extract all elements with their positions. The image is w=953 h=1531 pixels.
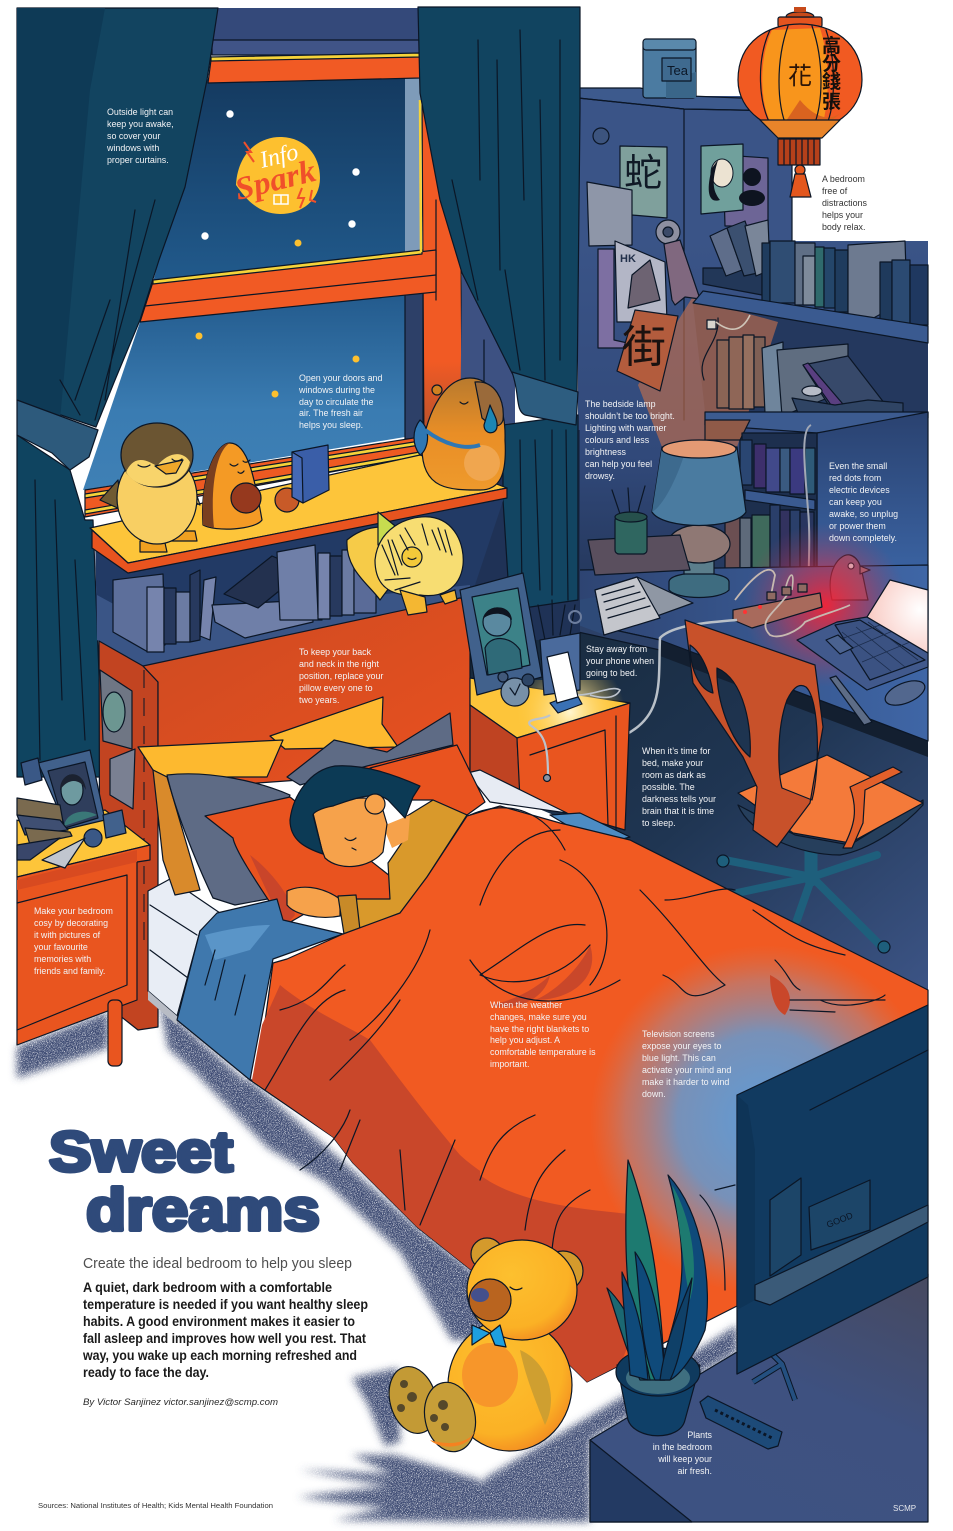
- note: darkness: [642, 746, 716, 828]
- note: plants: air fresh.: [677, 1466, 712, 1476]
- note: television: [642, 1029, 731, 1099]
- shelf back wall: [693, 303, 928, 412]
- note: darkness: bed, make your: [642, 758, 703, 768]
- intro text: way, you wake up each morning refreshed and: [82, 1348, 357, 1363]
- note: bedside lamp: shouldn’t be too bright.: [585, 411, 675, 421]
- icon: Chinese lantern: 張: [822, 92, 841, 113]
- note: blankets: When the weather: [490, 1000, 562, 1010]
- dark wall behind shelf: [462, 430, 580, 640]
- phone cable: [529, 715, 550, 776]
- note: decorating: [34, 906, 113, 976]
- note: blankets: comfortable temperature is: [490, 1047, 596, 1057]
- icon: Chinese lantern: 錢: [822, 70, 841, 93]
- icon: penguin toy: [100, 423, 200, 552]
- chair base: [725, 850, 880, 945]
- intro text: ready to face the day.: [83, 1365, 209, 1380]
- duck figure: [830, 555, 870, 600]
- icon: Info Spark logo: [231, 137, 320, 214]
- wall posters: [587, 128, 768, 391]
- curtain tie: [512, 372, 578, 425]
- note: fresh air: helps you sleep.: [299, 420, 363, 430]
- note: decorating: memories with: [34, 954, 91, 964]
- note: outside light: windows with: [106, 143, 159, 153]
- window frame: [422, 97, 462, 450]
- seat: [738, 800, 923, 855]
- grey pillows: [287, 713, 453, 785]
- icon: remote control: [700, 1396, 782, 1449]
- note: distractions: body relax.: [822, 222, 865, 232]
- note: bedside lamp: can help you feel: [585, 459, 652, 469]
- note: phone: [586, 644, 654, 678]
- note: distractions: [822, 174, 867, 232]
- icon: snake plant in pot: [607, 1160, 707, 1436]
- panel: window wall: [83, 8, 580, 640]
- note: red dots: red dots from: [829, 473, 881, 483]
- icon: blue book: [292, 445, 329, 503]
- note: distractions: A bedroom: [822, 174, 865, 184]
- icon: tea canister: [643, 39, 696, 98]
- icon: Chinese lantern: 高: [822, 34, 841, 57]
- note: blankets: important.: [490, 1059, 529, 1069]
- backrest: [685, 620, 823, 847]
- icon: cat toy: [347, 512, 463, 615]
- panel: right curtain: [418, 7, 580, 610]
- note: outside light: so cover your: [107, 131, 160, 141]
- note: darkness: possible. The: [642, 782, 695, 792]
- icon: capybara toy: [414, 378, 505, 490]
- note: bedside lamp: brightness: [585, 447, 627, 457]
- note: television: make it harder to wind: [642, 1077, 729, 1087]
- lower cabinet top and side: [705, 412, 928, 433]
- note: pillow: [299, 647, 383, 705]
- note: darkness: darkness tells your: [642, 794, 716, 804]
- note: blankets: [490, 1000, 596, 1069]
- note: phone: your phone when: [586, 656, 654, 666]
- note: pillow: position, replace your: [299, 671, 383, 681]
- note: fresh air: air. The fresh air: [299, 408, 363, 418]
- photo frame: [38, 750, 105, 829]
- hand and sleeve: [287, 887, 340, 917]
- neck: [383, 815, 410, 848]
- icon: Chinese lantern: 分: [822, 53, 841, 75]
- intro text: fall asleep and improves how well you rest. That: [83, 1331, 366, 1346]
- note: outside light: [106, 107, 174, 165]
- icon: avocado toy: [203, 443, 299, 529]
- icon: teddy bear: [382, 1238, 583, 1456]
- note: fresh air: [298, 373, 382, 430]
- yellow pillows: [270, 697, 398, 749]
- cord and wall charms: [702, 318, 718, 380]
- note: red dots: can keep you: [829, 497, 882, 507]
- note: blankets: help you adjust. A: [490, 1035, 560, 1045]
- note: pillow: and neck in the right: [299, 659, 379, 669]
- note: television: Television screens: [642, 1029, 715, 1039]
- note: blankets: have the right blankets to: [490, 1024, 589, 1034]
- blanket: [250, 806, 928, 1382]
- note: distractions: helps your: [822, 210, 863, 220]
- icon: Chinese lantern: [738, 7, 862, 197]
- note: decorating: it with pictures of: [34, 930, 101, 940]
- pencil cup and desk items: [588, 486, 690, 575]
- shelf books: [113, 545, 376, 652]
- stars: [196, 110, 360, 398]
- note: fresh air: day to circulate the: [299, 397, 374, 407]
- note: plants: [653, 1430, 713, 1476]
- note: pillow: To keep your back: [299, 647, 372, 657]
- icon: Info Spark logo: Info: [256, 139, 301, 174]
- note: pillow: pillow every one to: [299, 683, 373, 693]
- girl: [287, 766, 467, 934]
- note: pillow: two years.: [299, 695, 339, 705]
- icon: tea canister: Tea: [667, 63, 689, 78]
- intro text: temperature is needed if you want healthy sleep: [83, 1297, 368, 1312]
- torso: [340, 800, 467, 934]
- lamp light cone: [638, 298, 778, 447]
- note: decorating: your favourite: [34, 942, 88, 952]
- note: blankets: changes, make sure you: [490, 1012, 587, 1022]
- note: bedside lamp: The bedside lamp: [585, 399, 656, 409]
- small frames and books: [21, 758, 42, 785]
- icon: Info Spark logo: Spark: [231, 152, 319, 207]
- panel: right room wall and shelves: [578, 88, 928, 620]
- note: red dots: awake, so unplug: [829, 509, 898, 519]
- hair: [290, 766, 420, 854]
- note: outside light: Outside light can: [107, 107, 173, 117]
- middle shelf books: [717, 335, 903, 425]
- byline: By Victor Sanjinez victor.sanjinez@scmp.com: [83, 1397, 278, 1408]
- panel: TV stand: [590, 1274, 928, 1522]
- note: darkness: brain that it is time: [642, 806, 714, 816]
- intro text: A quiet, dark bedroom with a comfortable: [83, 1280, 332, 1295]
- subtitle: Create the ideal bedroom to help you sleep: [83, 1256, 352, 1272]
- alarm clock: [501, 678, 529, 706]
- photo frame: [460, 573, 542, 695]
- far blue sheet: [550, 813, 630, 845]
- sources: Sources: National Institutes of Health; Kids Mental Health Foundation: [38, 1501, 273, 1510]
- power strip and cables: [625, 570, 850, 735]
- blanket folds: [490, 945, 790, 1015]
- title: dreams: [86, 1177, 320, 1243]
- phone: [550, 693, 582, 713]
- blanket shaded side: [252, 985, 646, 1382]
- note: decorating: friends and family.: [34, 966, 105, 976]
- rear orange pillow: [370, 745, 485, 815]
- mattress: [148, 879, 220, 1016]
- title: [49, 1120, 320, 1243]
- note: distractions: free of: [822, 186, 848, 196]
- icon: bedside lamp: [652, 440, 746, 598]
- window sill: [85, 437, 424, 517]
- note: outside light: keep you awake,: [107, 119, 174, 129]
- title: Sweet: [49, 1120, 233, 1184]
- panel: left nightstand: [17, 750, 150, 1066]
- panel: right nightstand: [460, 573, 630, 830]
- red glow from electric devices: [740, 520, 928, 690]
- note: fresh air: Open your doors and: [299, 373, 382, 383]
- note: darkness: to sleep.: [642, 818, 676, 828]
- wall posters: 街: [622, 323, 666, 372]
- floor shadows: [17, 1005, 737, 1522]
- panel: left curtain: [17, 8, 218, 777]
- pen cup: [538, 600, 575, 640]
- note: bedside lamp: Lighting with warmer: [585, 423, 666, 433]
- note: decorating: cosy by decorating: [34, 918, 108, 928]
- note: bedside lamp: drowsy.: [585, 471, 615, 481]
- note: bedside lamp: [585, 399, 675, 481]
- icon: television rear: [737, 1005, 928, 1400]
- panel: desk and floor: [470, 565, 928, 1000]
- note: fresh air: windows during the: [298, 385, 375, 395]
- blue sheet: [177, 899, 343, 1080]
- note: red dots: electric devices: [829, 485, 890, 495]
- window glass: [153, 78, 405, 282]
- intro text: [82, 1280, 368, 1380]
- credit: SCMP: [893, 1504, 916, 1513]
- note: bedside lamp: colours and less: [585, 435, 650, 445]
- note: darkness: When it’s time for: [642, 746, 710, 756]
- pinned photos: [100, 670, 132, 749]
- lower cabinet books: [725, 440, 815, 582]
- panel: bed: [138, 697, 928, 1382]
- note: red dots: Even the small: [829, 461, 887, 471]
- icon: Chinese lantern: 花: [788, 63, 812, 90]
- blue TV glow on blanket: [520, 840, 928, 1382]
- upper shelf board: [693, 291, 928, 343]
- top shelf books: [703, 220, 928, 325]
- note: television: activate your mind and: [642, 1065, 731, 1075]
- note: red dots: or power them: [829, 521, 886, 531]
- panel: desk chair: [685, 620, 923, 953]
- curtain tie: [17, 400, 98, 470]
- note: plants: Plants: [687, 1430, 713, 1440]
- note: red dots: [829, 461, 898, 543]
- intro text: habits. A good environment makes it easier to: [83, 1314, 355, 1329]
- wall posters: HK: [620, 253, 636, 265]
- laptop: [797, 580, 928, 725]
- note: red dots: down completely.: [829, 533, 897, 543]
- head pillow: [205, 797, 395, 924]
- note: decorating: Make your bedroom: [34, 906, 113, 916]
- note: television: blue light. This can: [642, 1053, 716, 1063]
- wall posters: 蛇: [624, 153, 662, 195]
- note: phone: Stay away from: [586, 644, 647, 654]
- face: [313, 798, 387, 867]
- panel: bookshelf and headboard: [90, 455, 507, 1030]
- note: outside light: proper curtains.: [107, 155, 169, 165]
- note: plants: will keep your: [657, 1454, 712, 1464]
- icon: television rear: GOOD: [825, 1210, 855, 1230]
- yellow shelf: [90, 455, 507, 563]
- open notebook: [595, 577, 693, 635]
- note: distractions: distractions: [822, 198, 867, 208]
- right wall sliver: [460, 270, 515, 440]
- note: darkness: room as dark as: [642, 770, 706, 780]
- note: phone: going to bed.: [586, 668, 637, 678]
- note: plants: in the bedroom: [653, 1442, 712, 1452]
- note: television: down.: [642, 1089, 666, 1099]
- ear: [365, 794, 385, 814]
- far mattress: [467, 770, 567, 813]
- note: television: expose your eyes to: [642, 1041, 721, 1051]
